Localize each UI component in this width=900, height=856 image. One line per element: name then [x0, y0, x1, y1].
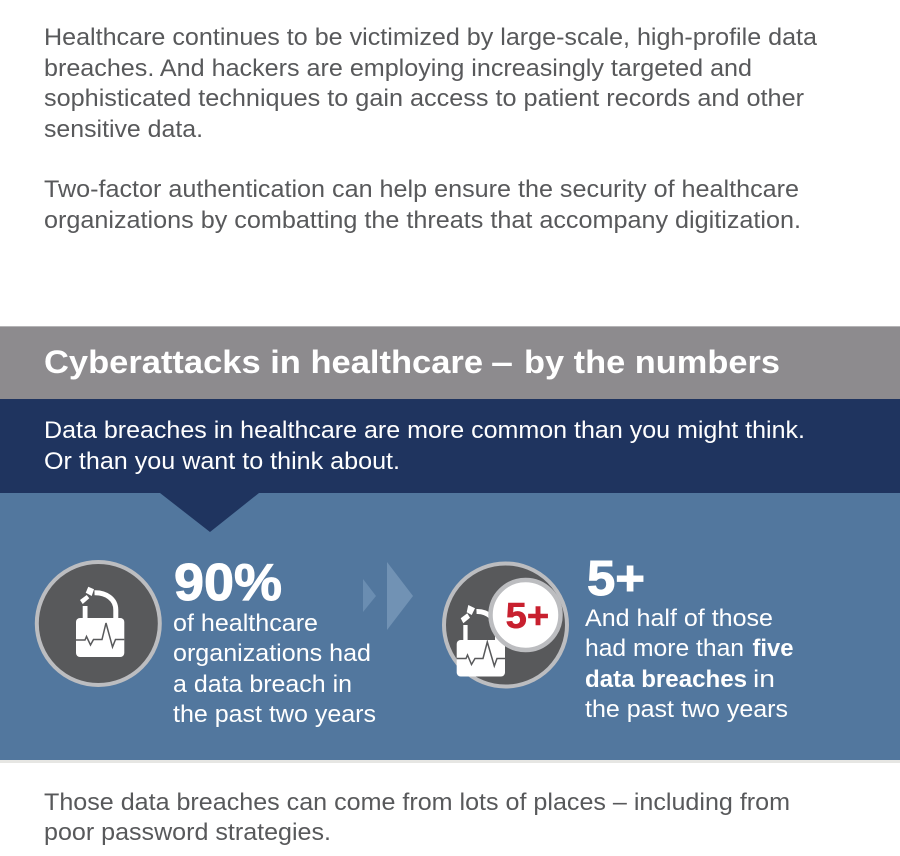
intro text block: organizations by combatting the threats that accompany digitization.: [44, 207, 801, 234]
intro text block: sensitive data.: [44, 116, 203, 143]
closing text block: Those data breaches can come from lots of places – including from: [44, 789, 790, 816]
icon: broken padlock with heartbeat: [37, 562, 160, 685]
subheading band with pointer: [0, 399, 900, 532]
subheading band with pointer: Or than you want to think about.: [44, 448, 400, 475]
stat: 5+ breaches: in: [753, 666, 775, 693]
stat: 90 percent: the past two years: [173, 701, 376, 728]
intro text block: Healthcare continues to be victimized by large-scale, high-profile data: [44, 24, 818, 51]
stat: 5+ breaches: And half of those: [585, 605, 773, 632]
intro text block: Two-factor authentication can help ensure the security of healthcare: [44, 176, 799, 203]
stat: 5+ breaches: had more than: [585, 635, 744, 662]
stat: 5+ breaches: five: [752, 635, 794, 662]
heading band: –: [491, 344, 513, 380]
heading band: Cyberattacks in healthcare: [44, 344, 483, 380]
stat: 5+ breaches: the past two years: [585, 696, 788, 723]
heading band: [0, 326, 900, 399]
arrows: [363, 562, 413, 630]
stat: 90 percent: organizations had: [173, 640, 371, 667]
stat: 5+ breaches: [585, 552, 794, 723]
stat: 90 percent: [173, 554, 376, 728]
intro text block: [44, 24, 818, 234]
stat: 5+ breaches: 5+: [587, 552, 645, 606]
closing text block: poor password strategies.: [44, 819, 331, 846]
intro text block: breaches. And hackers are employing increasingly targeted and: [44, 55, 752, 82]
stat: 90 percent: a data breach in: [173, 671, 352, 698]
stat: 90 percent: 90%: [174, 554, 282, 612]
subheading band with pointer: Data breaches in healthcare are more common than you might think.: [44, 417, 805, 444]
icon: padlock with 5+ badge: [444, 564, 567, 686]
panel: stats background: [0, 493, 900, 763]
intro text block: sophisticated techniques to gain access to patient records and other: [44, 85, 804, 112]
stat: 5+ breaches: data breaches: [585, 666, 747, 693]
stat: 90 percent: of healthcare: [173, 610, 318, 637]
heading band: by the numbers: [524, 344, 780, 380]
closing text block: [44, 789, 790, 846]
5+ badge: 5+: [506, 595, 549, 636]
